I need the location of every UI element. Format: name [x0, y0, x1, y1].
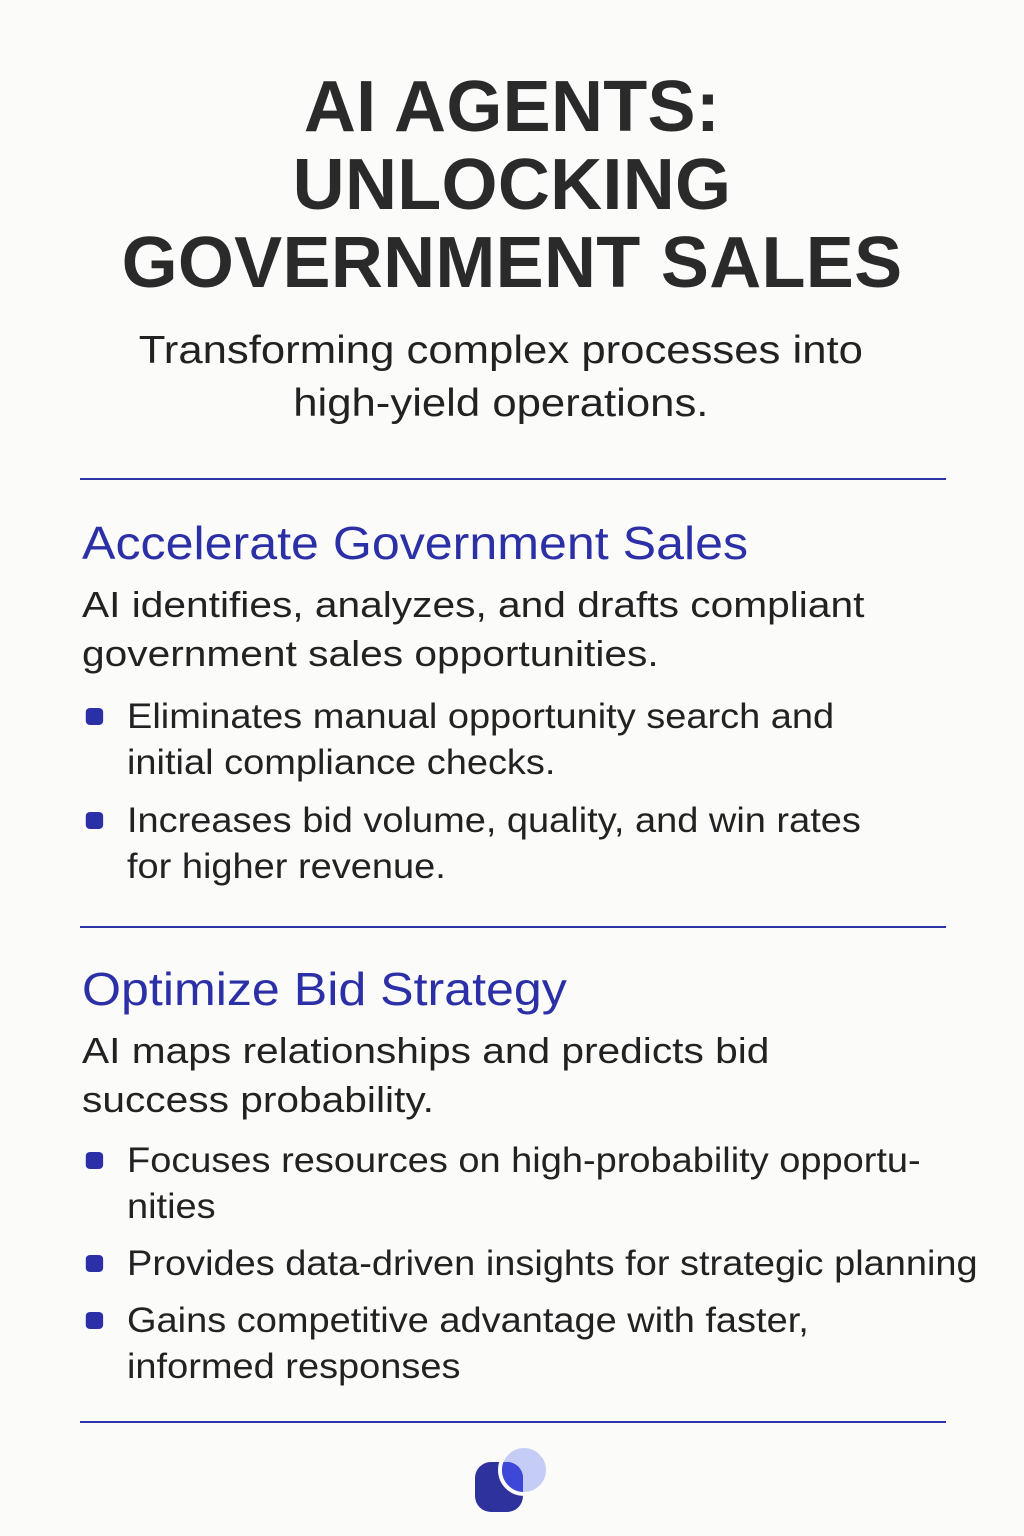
bullet 5	[86, 1301, 809, 1386]
body: accelerate	[82, 584, 864, 674]
body: accelerate: government sales opportunities.	[82, 633, 659, 674]
bullet 1: Eliminates manual opportunity search and	[127, 697, 834, 736]
body: optimize	[82, 1030, 769, 1120]
title	[122, 67, 902, 303]
bullet 2: for higher revenue.	[127, 847, 446, 886]
bullet 5: Gains competitive advantage with faster,	[127, 1301, 809, 1340]
heading: optimize: Optimize Bid Strategy	[82, 963, 567, 1015]
subtitle	[139, 329, 863, 425]
title: UNLOCKING	[293, 145, 731, 225]
subtitle: high-yield operations.	[293, 382, 708, 425]
bullet 5: informed responses	[127, 1347, 461, 1386]
title: AI AGENTS:	[304, 67, 720, 147]
body: optimize: AI maps relationships and predicts bid	[82, 1030, 769, 1071]
icon: logo	[475, 1448, 546, 1512]
bullet 3: Focuses resources on high-probability opportu-	[127, 1141, 921, 1180]
bullet 2: Increases bid volume, quality, and win rates	[127, 801, 861, 840]
title: GOVERNMENT SALES	[122, 223, 902, 303]
heading: accelerate: Accelerate Government Sales	[82, 517, 748, 569]
subtitle: Transforming complex processes into	[139, 329, 863, 372]
bullet 4: Provides data-driven insights for strategic planning	[127, 1244, 978, 1283]
bullet 1: initial compliance checks.	[127, 743, 555, 782]
bullet 3: nities	[127, 1187, 216, 1226]
bullet 2	[86, 801, 861, 886]
bullet 1	[86, 697, 834, 782]
body: optimize: success probability.	[82, 1079, 434, 1120]
bullet 3	[86, 1141, 921, 1226]
body: accelerate: AI identifies, analyzes, and drafts compliant	[82, 584, 864, 625]
